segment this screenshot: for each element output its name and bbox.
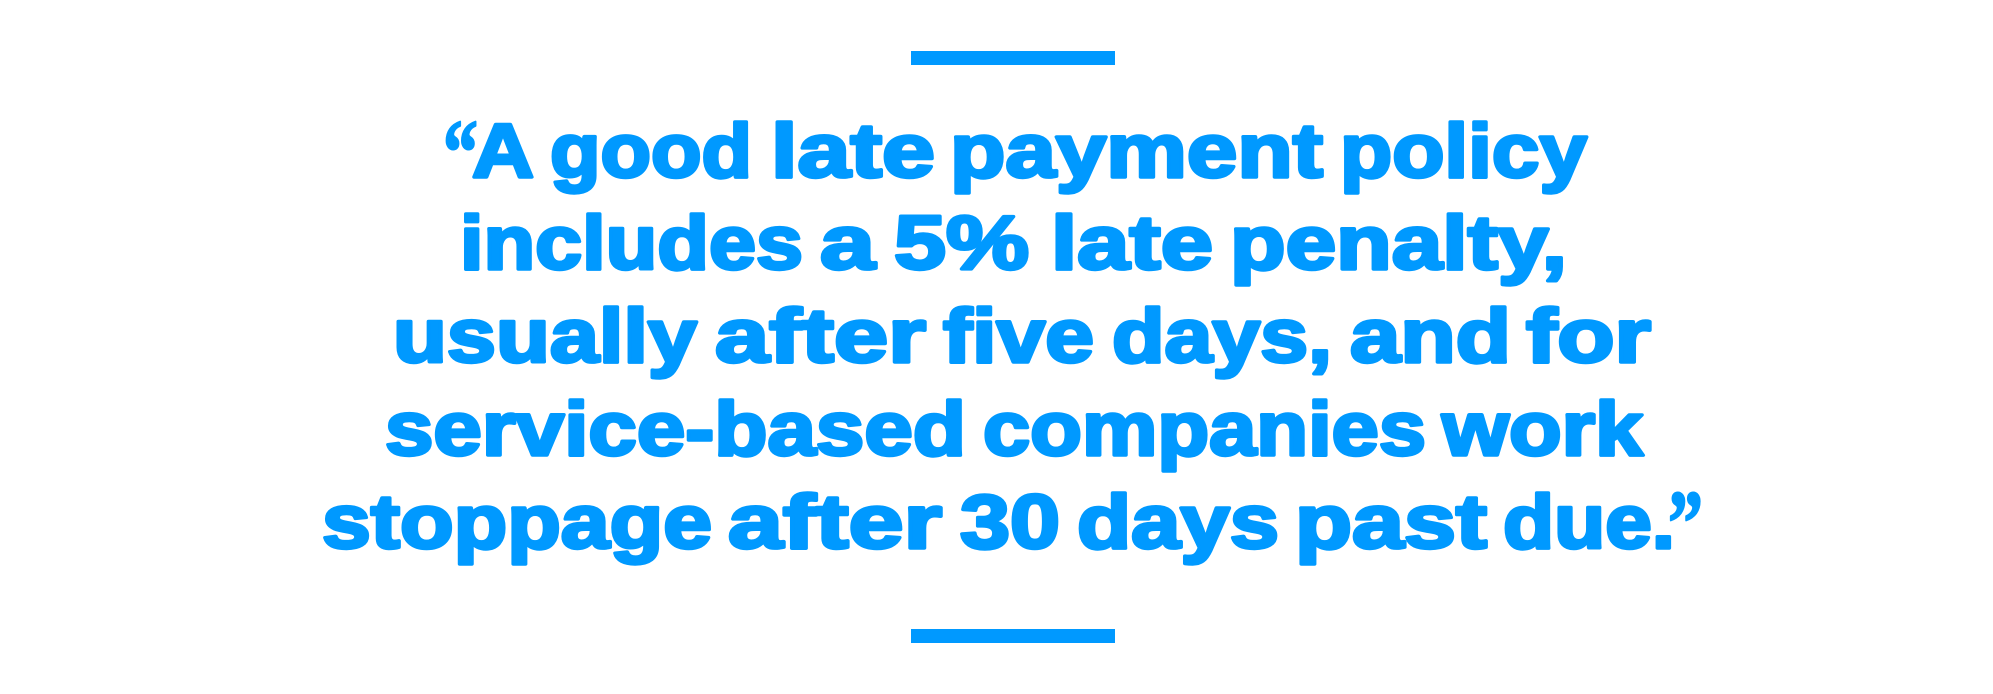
quote line 5: past	[1295, 480, 1487, 565]
quote line 4	[385, 387, 1644, 472]
quote line 1: good	[550, 109, 752, 194]
quote line 1: payment	[950, 109, 1323, 194]
quote line 4: work	[1441, 387, 1644, 472]
quote line 3: and	[1350, 294, 1511, 379]
top accent bar	[911, 51, 1115, 65]
bottom accent bar	[911, 629, 1115, 643]
quote line 1	[443, 101, 1587, 203]
quote line 4: companies	[983, 387, 1426, 472]
quote line 5: ”	[1668, 472, 1703, 574]
quote line 5: stoppage	[322, 480, 712, 565]
quote line 4: service-based	[385, 387, 966, 472]
quote line 1: policy	[1340, 109, 1587, 194]
quote text	[322, 101, 1703, 574]
quote line 5: 30	[960, 480, 1060, 565]
quote line 1: A	[472, 109, 534, 194]
quote line 5	[322, 472, 1703, 574]
quote line 2: penalty,	[1230, 201, 1567, 286]
quote line 2	[460, 201, 1567, 286]
quote line 1: “	[443, 101, 478, 203]
quote line 3: usually	[393, 294, 697, 379]
quote line 2: includes	[460, 201, 803, 286]
quote line 2: late	[1051, 201, 1213, 286]
quote line 3	[393, 294, 1651, 379]
quote line 3: for	[1526, 294, 1651, 379]
quote line 3: after	[715, 294, 926, 379]
quote line 1: late	[771, 109, 935, 194]
quote line 2: a	[820, 201, 876, 286]
quote line 5: due.	[1503, 480, 1675, 565]
quote line 3: five	[943, 294, 1094, 379]
quote line 2: 5%	[894, 201, 1029, 286]
quote line 5: days	[1077, 480, 1279, 565]
quote line 5: after	[728, 480, 942, 565]
quote line 3: days,	[1112, 294, 1332, 379]
